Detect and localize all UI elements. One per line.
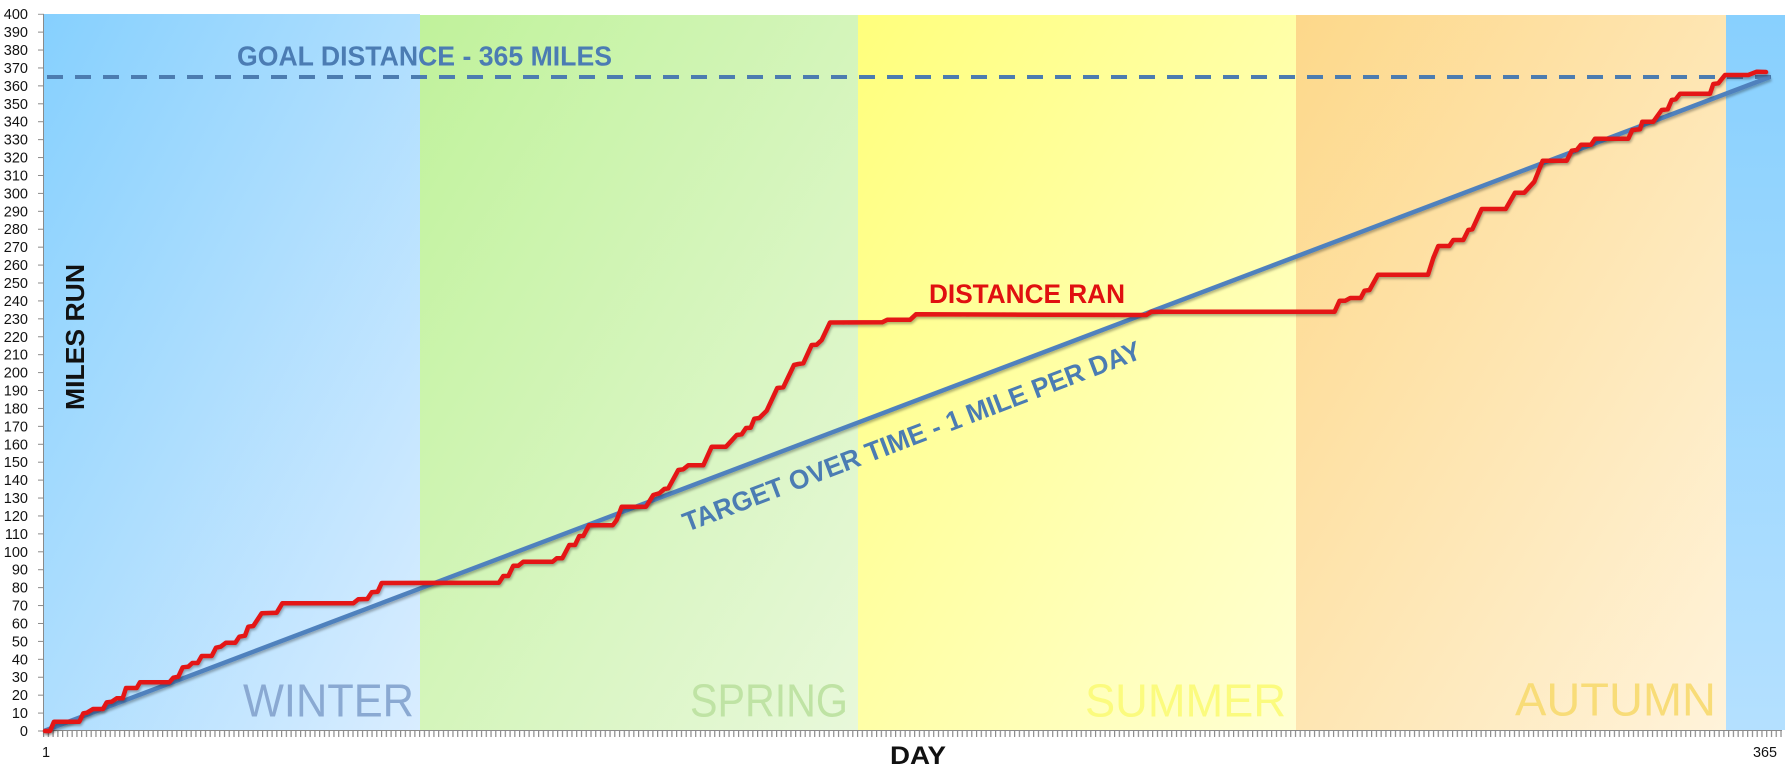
y axis tick labels: 390 — [4, 25, 28, 41]
y axis tick labels: 360 — [4, 79, 28, 95]
y axis tick labels: 300 — [4, 186, 28, 202]
target line label: TARGET OVER TIME - 1 MILE PER DAY — [678, 335, 1145, 538]
y axis — [4, 7, 44, 740]
y axis tick labels: 380 — [4, 43, 28, 59]
label: autumn: AUTUMN — [1515, 674, 1716, 726]
y axis tick labels: 340 — [4, 115, 28, 131]
y axis tick labels: 250 — [4, 276, 28, 292]
y axis tick labels: 40 — [12, 652, 28, 668]
y axis tick labels: 60 — [12, 616, 28, 632]
y axis line and tick marks — [38, 14, 44, 732]
x axis label: day 365: 365 — [1753, 745, 1777, 761]
y axis tick labels: 260 — [4, 258, 28, 274]
y axis tick labels: 320 — [4, 151, 28, 167]
y axis tick labels: 330 — [4, 133, 28, 149]
y axis tick labels: 170 — [4, 419, 28, 435]
season labels — [243, 674, 1716, 726]
distance ran label: DISTANCE RAN — [929, 279, 1125, 309]
goal distance dashed line — [47, 75, 1771, 79]
y axis tick labels: 370 — [4, 61, 28, 77]
label: winter: WINTER — [243, 674, 414, 726]
panel: autumn — [1296, 15, 1726, 730]
x axis day ticks — [43, 730, 1782, 737]
y axis tick labels: 350 — [4, 97, 28, 113]
y axis tick labels: 230 — [4, 312, 28, 328]
y axis tick labels: 100 — [4, 545, 28, 561]
x axis — [42, 730, 1782, 761]
y axis tick labels: 30 — [12, 670, 28, 686]
panel: summer — [858, 15, 1296, 730]
y axis tick labels: 140 — [4, 473, 28, 489]
y axis tick labels: 110 — [5, 527, 28, 543]
y axis tick labels: 0 — [20, 724, 28, 740]
y axis tick labels — [4, 7, 28, 740]
y axis tick labels: 160 — [4, 437, 28, 453]
panel: spring — [420, 15, 858, 730]
y axis tick labels: 50 — [12, 634, 28, 650]
y axis tick labels: 290 — [4, 204, 28, 220]
y axis tick labels: 150 — [4, 455, 28, 471]
y axis tick labels: 270 — [4, 240, 28, 256]
label: summer: SUMMER — [1085, 674, 1286, 726]
y axis tick labels: 200 — [4, 366, 28, 382]
y axis tick labels: 280 — [4, 222, 28, 238]
goal distance label: GOAL DISTANCE - 365 MILES — [237, 40, 612, 72]
y axis tick labels: 130 — [4, 491, 28, 507]
y axis tick labels: 240 — [4, 294, 28, 310]
y axis tick labels: 310 — [4, 168, 28, 184]
y axis title: MILES RUN — [60, 264, 90, 410]
x axis title: DAY — [890, 742, 946, 770]
label: spring: SPRING — [690, 674, 848, 726]
y axis tick labels: 70 — [12, 599, 28, 615]
y axis tick labels: 180 — [4, 401, 28, 417]
y axis tick labels: 20 — [12, 688, 28, 704]
y axis tick labels: 90 — [12, 563, 28, 579]
y axis tick labels: 220 — [4, 330, 28, 346]
y axis tick labels: 80 — [12, 581, 28, 597]
y axis tick labels: 120 — [4, 509, 28, 525]
panel: winter — [44, 14, 420, 730]
y axis tick labels: 10 — [12, 706, 28, 722]
y axis tick labels: 190 — [4, 384, 28, 400]
x axis label: day 1: 1 — [42, 745, 50, 761]
y axis tick labels: 210 — [4, 348, 28, 364]
y axis tick labels: 400 — [4, 7, 28, 23]
panel: winter, year end — [1726, 15, 1785, 730]
